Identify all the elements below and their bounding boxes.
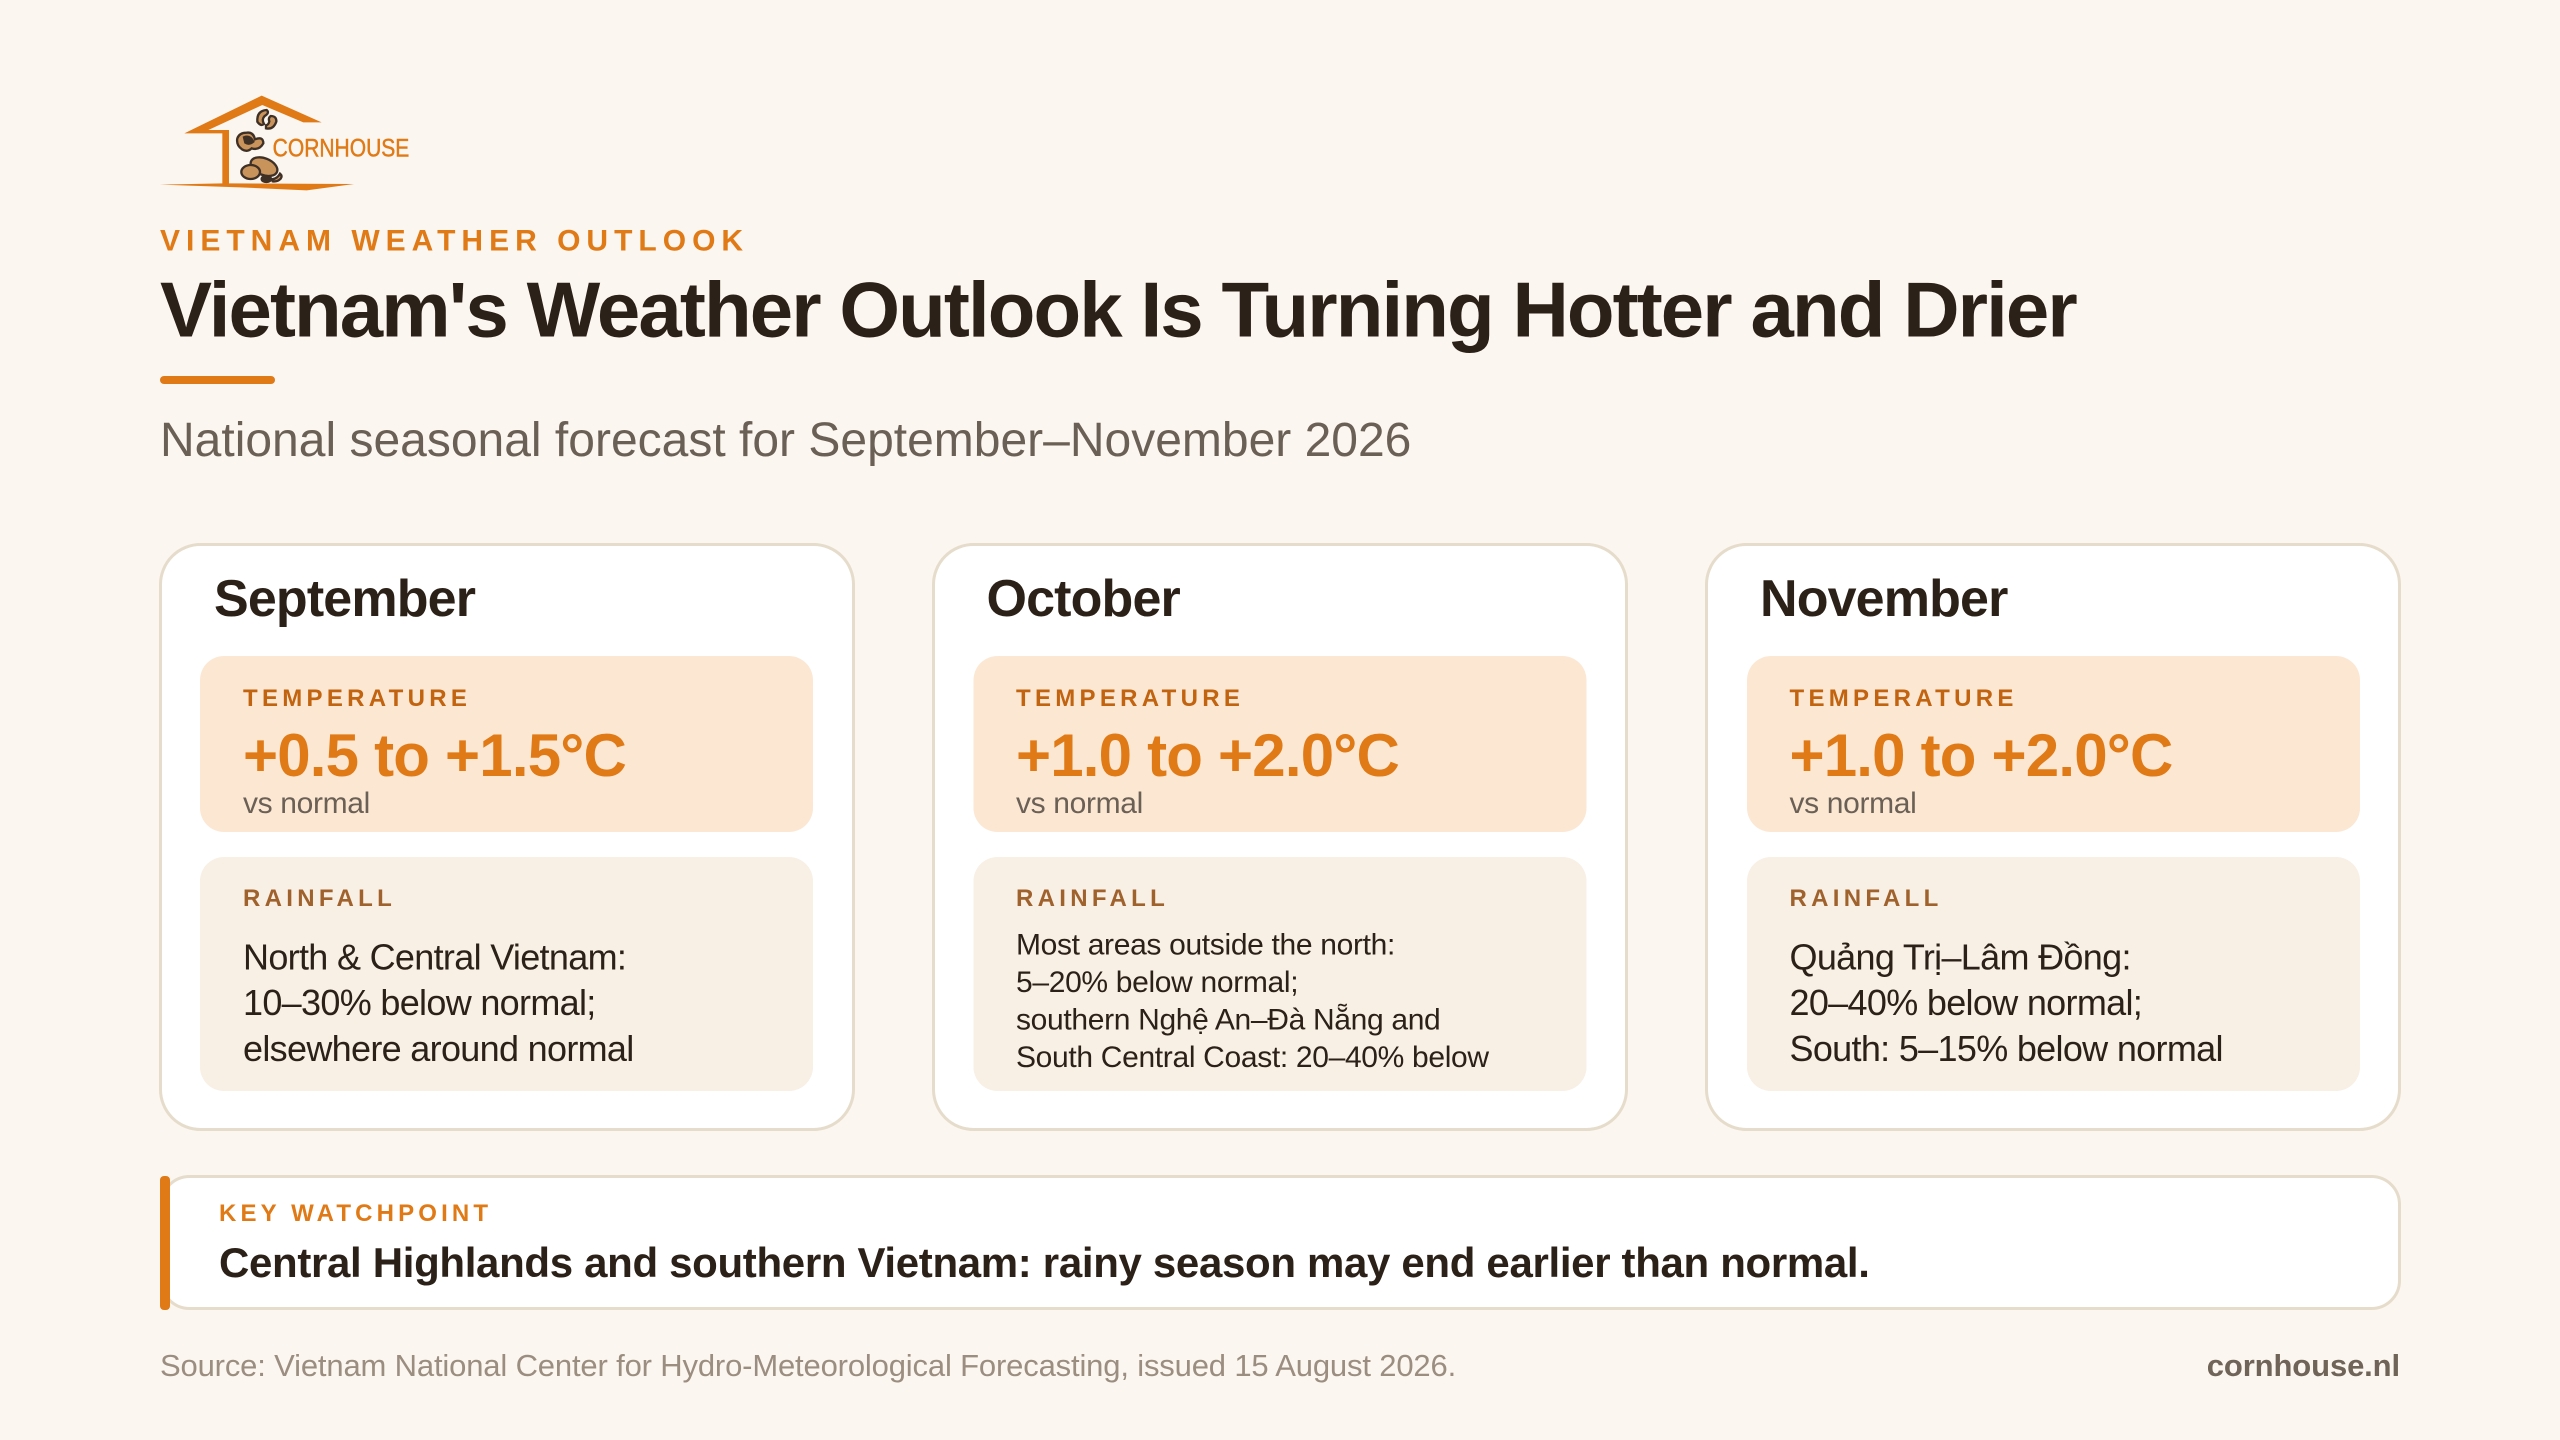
card background [160,544,854,1130]
rainfall box: southern Nghệ An–Đà Nẵng and [1016,1004,1440,1036]
logo wordmark: CORNHOUSE [273,136,409,163]
rainfall box: South: 5–15% below normal [1790,1028,2223,1069]
temperature box: +0.5 to +1.5°C [243,722,626,789]
temperature box: TEMPERATURE [1790,685,2018,712]
temperature box [974,656,1586,832]
logo: Cornhouse [160,96,409,190]
temperature box [1747,656,2360,832]
rainfall box: RAINFALL [1790,885,1943,912]
rainfall box: 5–20% below normal; [1016,966,1298,999]
month heading: October [986,570,1181,628]
rainfall box: 10–30% below normal; [243,982,596,1023]
rainfall box [1747,857,2360,1091]
watchpoint text: Central Highlands and southern Vietnam: rainy season may end earlier than normal. [219,1239,1870,1286]
month heading: November [1760,570,2008,628]
card background [934,544,1626,1130]
temperature box: vs normal [1790,787,1916,820]
rainfall box: Quảng Trị–Lâm Đồng: [1790,936,2131,978]
eyebrow: VIETNAM WEATHER OUTLOOK [160,225,749,258]
temperature box: +1.0 to +2.0°C [1790,722,2172,789]
rainfall box: elsewhere around normal [243,1028,634,1069]
title: Vietnam's Weather Outlook Is Turning Hotter and Drier [160,266,2077,354]
temperature box: vs normal [1016,787,1143,820]
panel: key watchpoint [160,1176,2400,1310]
accent rule [160,376,275,384]
rainfall box: 20–40% below normal; [1790,982,2142,1023]
temperature box: vs normal [243,787,370,820]
icon: house outline [160,96,354,190]
temperature box: TEMPERATURE [243,685,471,712]
accent bar [160,1176,170,1310]
subtitle: National seasonal forecast for September–November 2026 [160,414,1411,467]
month heading: September [214,570,476,628]
rainfall box: North & Central Vietnam: [243,936,626,978]
rainfall box [974,857,1586,1091]
temperature box: TEMPERATURE [1016,685,1244,712]
panel: November [1706,544,2400,1130]
panel: October [934,544,1626,1130]
rainfall box: RAINFALL [1016,885,1169,912]
rainfall box [200,857,813,1091]
watchpoint background [162,1176,2400,1308]
rainfall box: RAINFALL [243,885,396,912]
temperature box [200,656,813,832]
website: cornhouse.nl [2207,1348,2400,1383]
source note: Source: Vietnam National Center for Hydro-Meteorological Forecasting, issued 15 August 2026. [160,1348,1456,1383]
card background [1706,544,2400,1130]
temperature box: +1.0 to +2.0°C [1016,722,1399,789]
rainfall box: Most areas outside the north: [1016,928,1395,962]
rainfall box: South Central Coast: 20–40% below [1016,1041,1489,1074]
watchpoint label: KEY WATCHPOINT [219,1200,492,1227]
icon: nuts [237,110,282,182]
panel: September [160,544,854,1130]
